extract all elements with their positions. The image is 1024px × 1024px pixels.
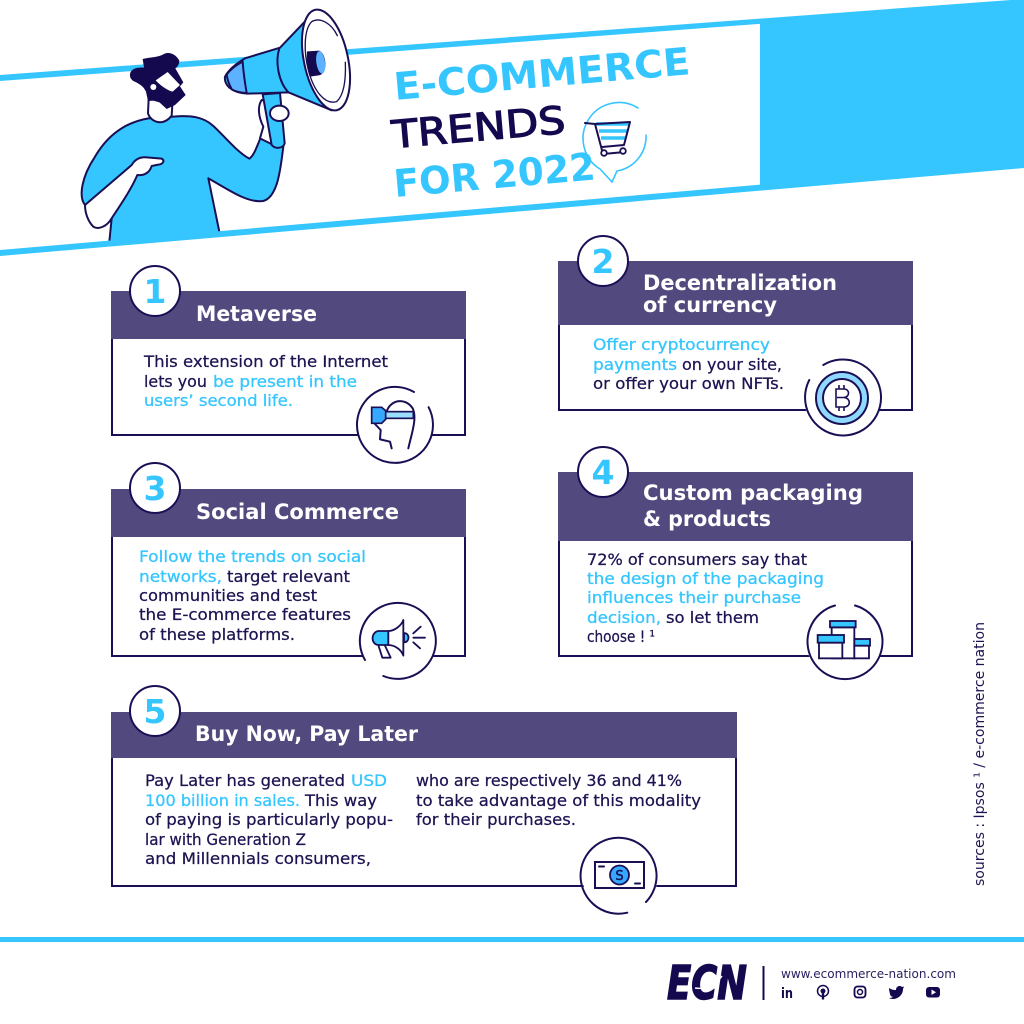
body text xyxy=(143,352,388,410)
icon: linkedin: in xyxy=(781,986,793,1002)
icon: banknote xyxy=(581,837,658,914)
body text: Follow the trends on social xyxy=(139,547,366,566)
inner cone ellipse xyxy=(315,51,327,74)
heading: of currency xyxy=(643,293,777,317)
megaphone tip xyxy=(227,62,247,93)
inner cone xyxy=(307,51,325,76)
bell inner line xyxy=(305,20,345,102)
heading: & products xyxy=(643,507,771,531)
body text: the E-commerce features xyxy=(139,605,351,624)
heading xyxy=(643,271,837,317)
heading: Custom packaging xyxy=(643,481,863,505)
ear xyxy=(150,84,156,90)
speech bubble with cart xyxy=(583,103,646,182)
body text left column: USD xyxy=(351,771,387,790)
megaphone cone xyxy=(225,19,332,110)
header lower band xyxy=(0,162,1024,256)
cone seam xyxy=(277,48,288,92)
body text left column: Pay Later has generated xyxy=(145,771,345,790)
torso fill xyxy=(82,116,283,242)
heading xyxy=(643,481,863,531)
body text: 72% of consumers say that xyxy=(587,550,807,569)
body text: This extension of the Internet xyxy=(143,352,388,371)
body text right column: for their purchases. xyxy=(416,810,576,829)
body text: users’ second life. xyxy=(144,391,293,410)
body text: be present in the xyxy=(213,372,357,391)
footer separator xyxy=(762,966,764,1000)
icon: podcast xyxy=(818,986,828,1000)
body text xyxy=(587,550,824,646)
bell rim xyxy=(294,5,358,115)
body text: decision, xyxy=(587,608,661,627)
panel: 4 custom packaging and products: 4 xyxy=(592,453,614,492)
body text left column: This way xyxy=(304,791,377,810)
body text: so let them xyxy=(666,608,759,627)
social icons xyxy=(781,986,940,1002)
icon: youtube xyxy=(926,987,940,998)
body text xyxy=(139,547,366,644)
body text: or offer your own NFTs. xyxy=(593,374,784,393)
title line 1: E-COMMERCE xyxy=(392,39,692,109)
body text: communities and test xyxy=(139,586,317,605)
illustration: man with megaphone xyxy=(82,5,358,242)
icon: banknote: S xyxy=(615,869,624,884)
panel: 4 custom packaging and products xyxy=(558,447,913,679)
panel: 2 decentralization of currency xyxy=(558,236,913,436)
body text left column: 100 billion in sales. xyxy=(145,791,300,810)
panel: 5 buy now, pay later: 5 xyxy=(144,692,166,731)
pointing forearm xyxy=(85,157,163,228)
heading: Metaverse xyxy=(196,302,317,326)
body text right column: who are respectively 36 and 41% xyxy=(416,771,682,790)
panel: 1 metaverse xyxy=(111,266,466,463)
megaphone and hand xyxy=(225,5,358,148)
face xyxy=(156,72,180,92)
website: www.ecommerce-nation.com xyxy=(781,967,956,981)
body text right column xyxy=(416,771,701,829)
panel: 1 metaverse: 1 xyxy=(144,272,166,311)
body text: target relevant xyxy=(227,567,350,586)
title line 3: FOR 2022 xyxy=(392,145,597,206)
heading: Buy Now, Pay Later xyxy=(195,722,419,746)
heading: Social Commerce xyxy=(196,500,399,524)
heading: Decentralization xyxy=(643,271,837,295)
body text xyxy=(593,335,784,393)
sources note: sources : Ipsos ¹ / e-commerce nation xyxy=(972,622,988,886)
body text: of these platforms. xyxy=(139,625,295,644)
man body xyxy=(82,116,283,242)
body text left column: and Millennials consumers, xyxy=(145,849,371,868)
head xyxy=(130,53,186,122)
panel: 3 social commerce: 3 xyxy=(144,469,166,508)
neck xyxy=(148,98,172,122)
body text left column: lar with Generation Z xyxy=(145,830,306,849)
body text: Offer cryptocurrency xyxy=(593,335,770,354)
panel: 2 decentralization of currency: 2 xyxy=(592,242,614,281)
hair and beard xyxy=(130,53,186,109)
header banner xyxy=(0,0,1024,187)
title xyxy=(389,39,692,206)
body text: choose ! ¹ xyxy=(587,627,655,646)
icon: megaphone xyxy=(360,603,436,679)
body text: lets you xyxy=(144,372,207,391)
body text left column xyxy=(145,771,393,868)
megaphone handle xyxy=(263,93,285,148)
icon: product boxes xyxy=(806,603,882,679)
body text: on your site, xyxy=(682,355,782,374)
body text: networks, xyxy=(139,567,222,586)
footer rule xyxy=(0,937,1024,942)
hand behind handle xyxy=(259,100,278,145)
panel: 5 buy now, pay later xyxy=(111,686,737,914)
icon: instagram xyxy=(854,986,866,998)
title line 2: TRENDS xyxy=(389,98,567,157)
body text left column: of paying is particularly popu- xyxy=(145,810,393,829)
icon: bitcoin xyxy=(804,359,881,436)
body text right column: to take advantage of this modality xyxy=(416,791,701,810)
body text: influences their purchase xyxy=(587,588,801,607)
fingers xyxy=(270,106,289,121)
icon: twitter xyxy=(889,986,904,999)
torso outline xyxy=(82,116,283,242)
body text: payments xyxy=(593,355,677,374)
body text: the design of the packaging xyxy=(587,569,824,588)
panel: 3 social commerce xyxy=(111,463,466,679)
icon: VR headset xyxy=(357,387,433,463)
footer logo: ECN xyxy=(667,956,747,1010)
